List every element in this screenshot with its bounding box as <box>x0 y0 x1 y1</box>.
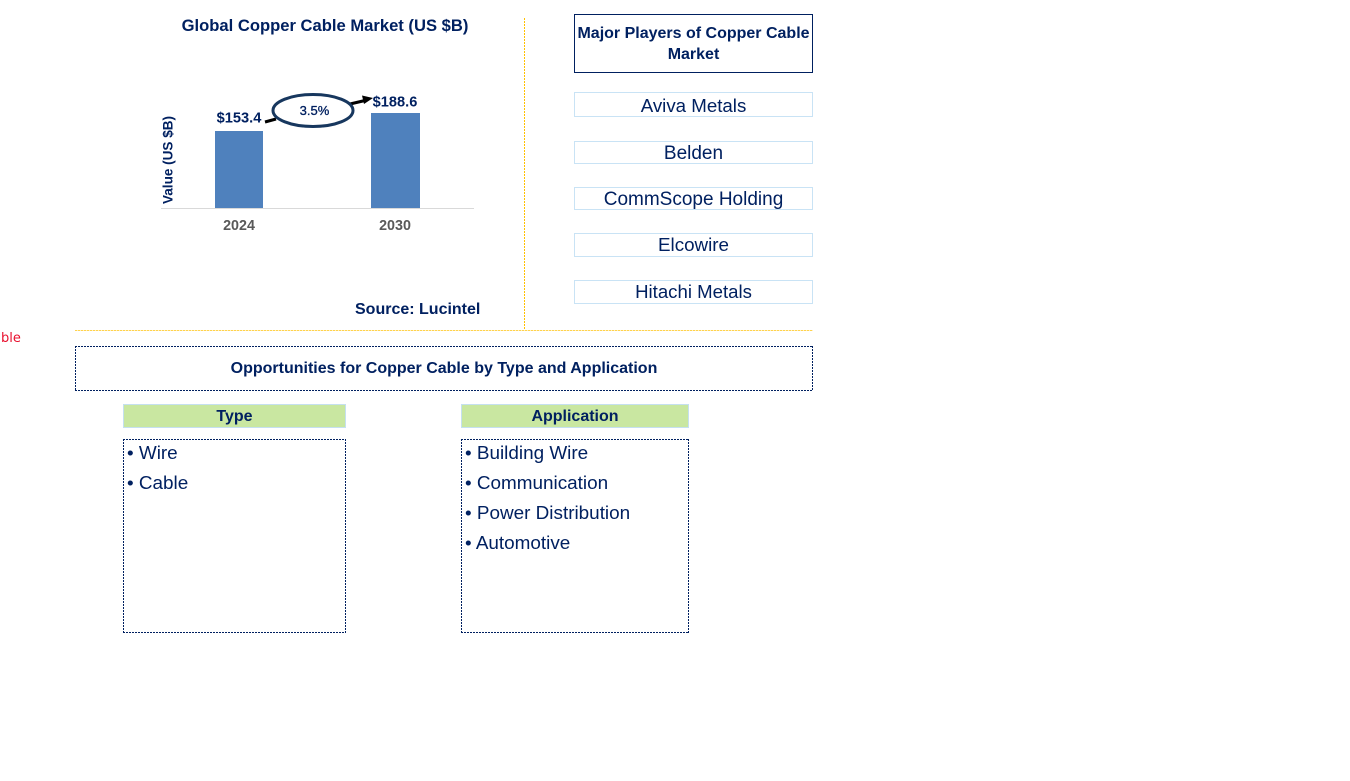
y axis label: Value (US $B) <box>160 116 176 204</box>
item: Automotive: • Automotive <box>465 533 570 554</box>
application list <box>461 439 689 633</box>
opportunities heading: Opportunities for Copper Cable by Type and Application <box>231 360 657 377</box>
stray red text: ble <box>1 331 21 346</box>
item: Communication: • Communication <box>465 473 608 494</box>
item: Building Wire: • Building Wire <box>465 443 588 464</box>
horizontal divider <box>75 330 813 331</box>
player: Belden <box>574 141 813 164</box>
type header <box>123 404 346 428</box>
growth rate oval: 3.5% <box>300 103 330 118</box>
application header: Application <box>531 408 619 425</box>
item: Wire: • Wire <box>127 443 178 464</box>
vertical divider <box>524 18 525 330</box>
growth arrow <box>265 96 373 122</box>
type header: Type <box>216 408 253 425</box>
bar 2024 <box>215 131 263 208</box>
axis line <box>161 208 474 210</box>
panel: major players <box>574 14 813 304</box>
player: Elcowire <box>574 233 813 257</box>
bar chart <box>160 93 474 234</box>
panel: type <box>123 404 346 633</box>
panel: application <box>461 404 689 633</box>
value 2030: $188.6 <box>373 94 417 110</box>
category 2024: 2024 <box>223 218 255 234</box>
player: Aviva Metals <box>574 92 813 117</box>
players heading: Major Players of Copper Cable Market <box>577 25 810 63</box>
application header <box>461 404 689 428</box>
growth rate oval <box>273 94 353 126</box>
player: Aviva Metals: Aviva Metals <box>641 95 746 116</box>
bar 2030 <box>371 113 420 208</box>
player: Hitachi Metals: Hitachi Metals <box>635 281 752 302</box>
opportunities heading <box>75 346 813 391</box>
value 2024: $153.4 <box>217 110 262 126</box>
source note: Source: Lucintel <box>355 301 480 318</box>
player: CommScope Holding <box>574 187 813 210</box>
item: Power Distribution: • Power Distribution <box>465 503 630 524</box>
category 2030: 2030 <box>379 218 411 234</box>
type list <box>123 439 346 633</box>
player: Elcowire: Elcowire <box>658 234 729 255</box>
chart title: Global Copper Cable Market (US $B) <box>182 16 468 35</box>
player: Hitachi Metals <box>574 280 813 304</box>
player: CommScope Holding: CommScope Holding <box>604 189 783 210</box>
players heading <box>574 14 813 73</box>
player: Belden: Belden <box>664 143 723 164</box>
item: Cable: • Cable <box>127 473 188 494</box>
